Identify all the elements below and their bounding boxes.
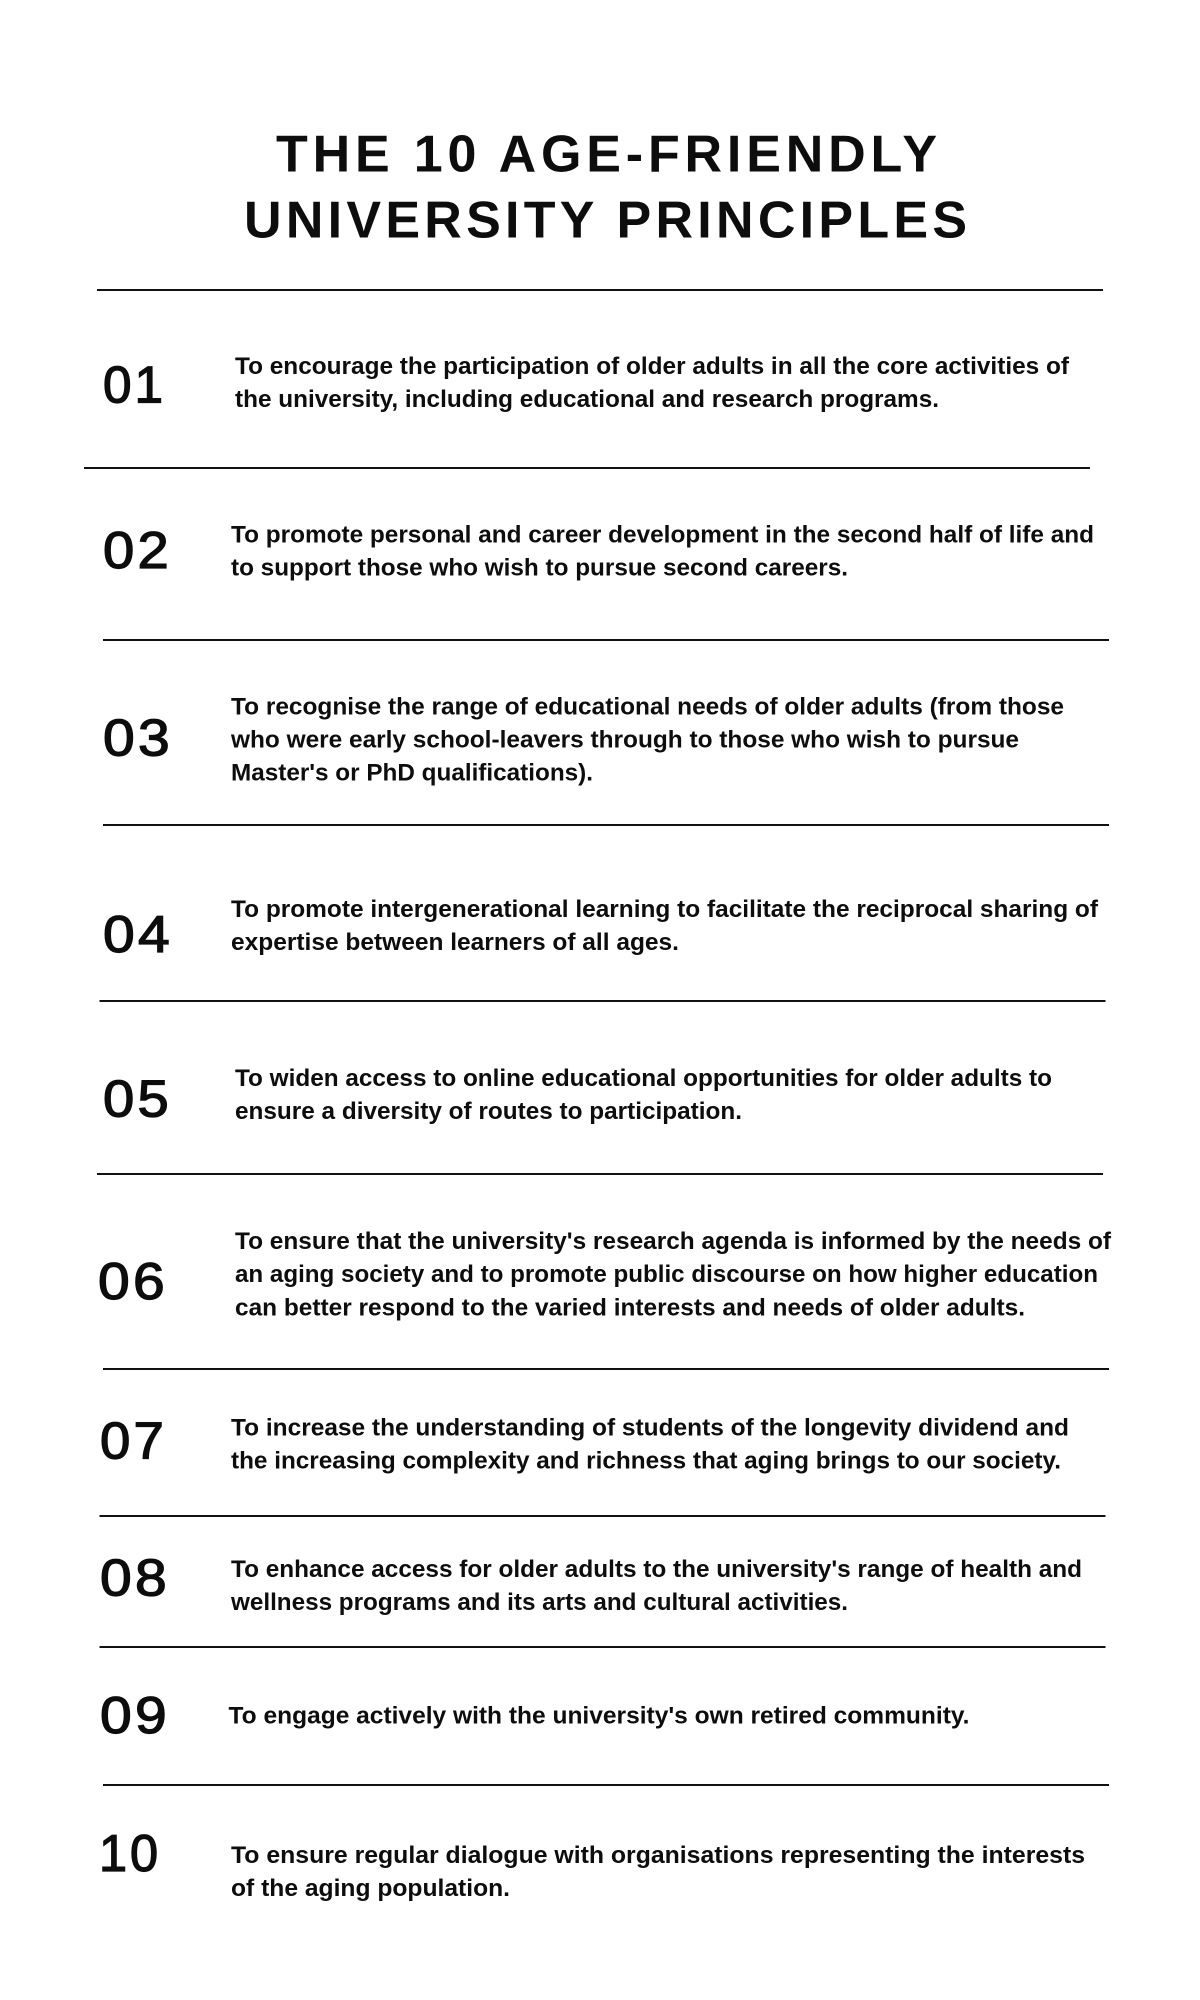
text 05: To widen access to online educational opportunities for older adults to [235,1065,1052,1092]
text 07: To increase the understanding of students of the longevity dividend and [231,1414,1069,1442]
text 02 [231,522,1094,582]
principle 08 [100,1550,1082,1616]
text 03: who were early school-leavers through to those who wish to pursue [230,726,1019,754]
number 01: 01 [103,356,166,414]
number 05: 05 [103,1070,172,1128]
number 06: 06 [98,1253,168,1311]
title: THE 10 AGE-FRIENDLY [276,126,937,184]
title [244,126,967,250]
number 07: 07 [100,1412,167,1470]
text 10: of the aging population. [231,1875,510,1902]
text 05 [235,1065,1052,1125]
text 08: To enhance access for older adults to the university's range of health and [231,1556,1082,1583]
principle 03 [103,694,1064,786]
number 09: 09 [100,1687,170,1745]
principle 09 [100,1687,970,1745]
principle 07 [100,1412,1069,1474]
text 04: expertise between learners of all ages. [231,929,679,956]
text 09: To engage actively with the university's own retired community. [228,1702,970,1730]
text 05: ensure a diversity of routes to participation. [235,1098,742,1125]
number 02: 02 [103,522,172,580]
text 10 [231,1842,1085,1902]
text 07 [231,1414,1069,1474]
principle 02 [103,522,1094,582]
text 03: To recognise the range of educational needs of older adults (from those [231,694,1064,720]
text 06: can better respond to the varied interests and needs of older adults. [235,1294,1025,1322]
principle 06 [98,1228,1112,1322]
number 04: 04 [103,906,173,964]
text 06: an aging society and to promote public discourse on how higher education [235,1261,1098,1288]
title: UNIVERSITY PRINCIPLES [244,192,967,250]
text 02: To promote personal and career development in the second half of life and [231,522,1094,548]
text 10: To ensure regular dialogue with organisations representing the interests [231,1842,1085,1869]
text 02: to support those who wish to pursue second careers. [231,554,848,582]
text 04 [231,896,1099,956]
text 01: the university, including educational and research programs. [235,386,939,413]
text 06 [235,1228,1112,1322]
principle 05 [103,1065,1052,1128]
number 08: 08 [100,1550,170,1608]
text 04: To promote intergenerational learning to facilitate the reciprocal sharing of [231,896,1099,923]
principle 10 [99,1825,1085,1902]
text 03: Master's or PhD qualifications). [231,760,593,786]
text 01: To encourage the participation of older adults in all the core activities of [235,353,1070,380]
text 03 [230,694,1064,786]
text 07: the increasing complexity and richness that aging brings to our society. [231,1448,1061,1474]
text 08 [230,1556,1082,1616]
text 01 [235,353,1070,413]
text 08: wellness programs and its arts and cultural activities. [230,1589,848,1616]
number 10: 10 [99,1825,161,1883]
principle 01 [103,353,1070,414]
principle 04 [103,896,1099,964]
text 06: To ensure that the university's research agenda is informed by the needs of [235,1228,1112,1255]
number 03: 03 [103,710,173,768]
